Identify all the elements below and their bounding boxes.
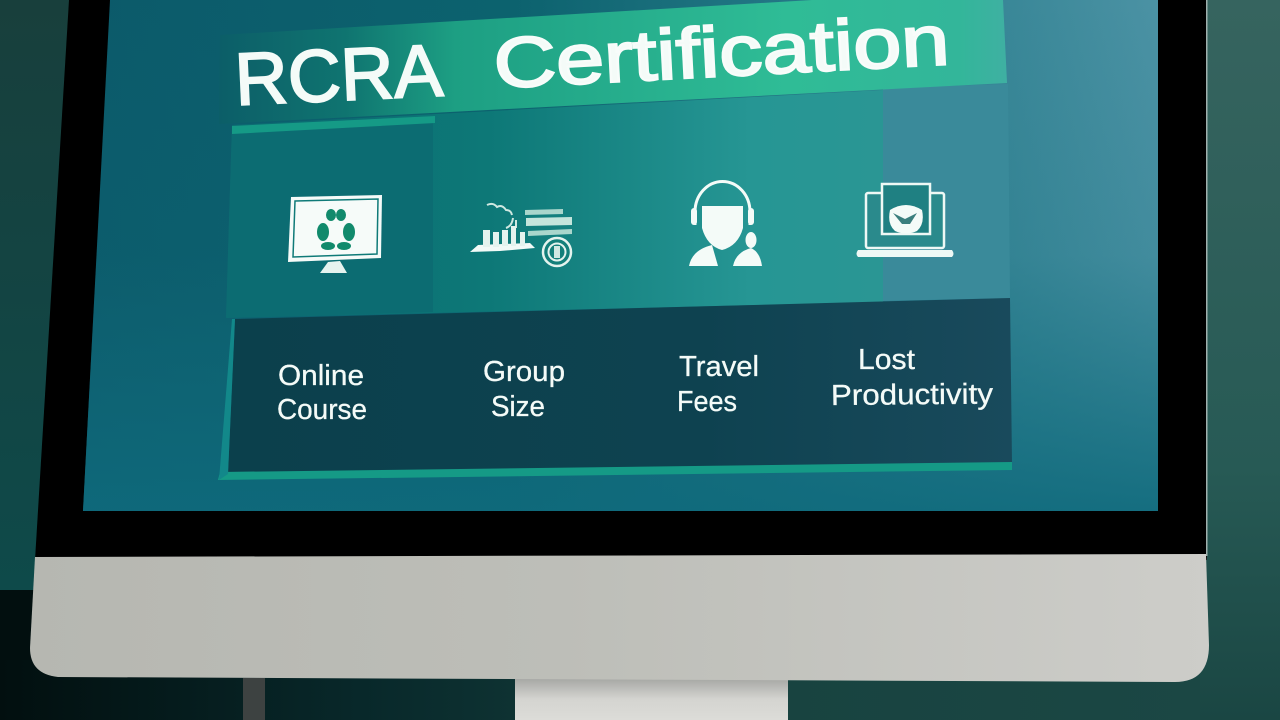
- icon: online course monitor: [288, 195, 382, 273]
- title text: Certification: Certification: [492, 1, 951, 104]
- icon: laptop with crest: [856, 184, 954, 257]
- monitor chin: silver: [30, 554, 1209, 682]
- label: Online Course: [277, 360, 367, 426]
- label: Travel Fees: [677, 351, 759, 418]
- background wall left: [0, 0, 90, 600]
- label: Group Size: Size: [491, 391, 545, 423]
- label: Lost Productivity: [831, 344, 994, 412]
- monitor stand: [515, 678, 788, 720]
- floor strip below monitor: [0, 660, 1200, 720]
- label: Travel Fees: Fees: [677, 386, 737, 418]
- label: Online Course: Course: [277, 394, 367, 426]
- icon: headset person: [689, 181, 762, 266]
- label: Online Course: Online: [278, 360, 364, 392]
- stand shadow: [243, 678, 265, 720]
- label: Lost Productivity: Productivity: [831, 379, 994, 412]
- panel: icon area: [226, 84, 1010, 318]
- label: Lost Productivity: Lost: [858, 344, 915, 376]
- label: Group Size: Group: [483, 356, 565, 388]
- title banner: [219, 0, 1007, 124]
- label: Group Size: [483, 356, 565, 423]
- screen: [83, 0, 1158, 511]
- background wall right: [1190, 0, 1280, 720]
- title text: RCRA: RCRA: [233, 29, 445, 121]
- icon: group size stacks: [470, 204, 572, 266]
- dark shadow left of monitor: [0, 590, 60, 690]
- label: Travel Fees: Travel: [679, 351, 759, 383]
- panel: dark labels: [218, 298, 1012, 480]
- monitor body: black bezel: [35, 0, 1207, 560]
